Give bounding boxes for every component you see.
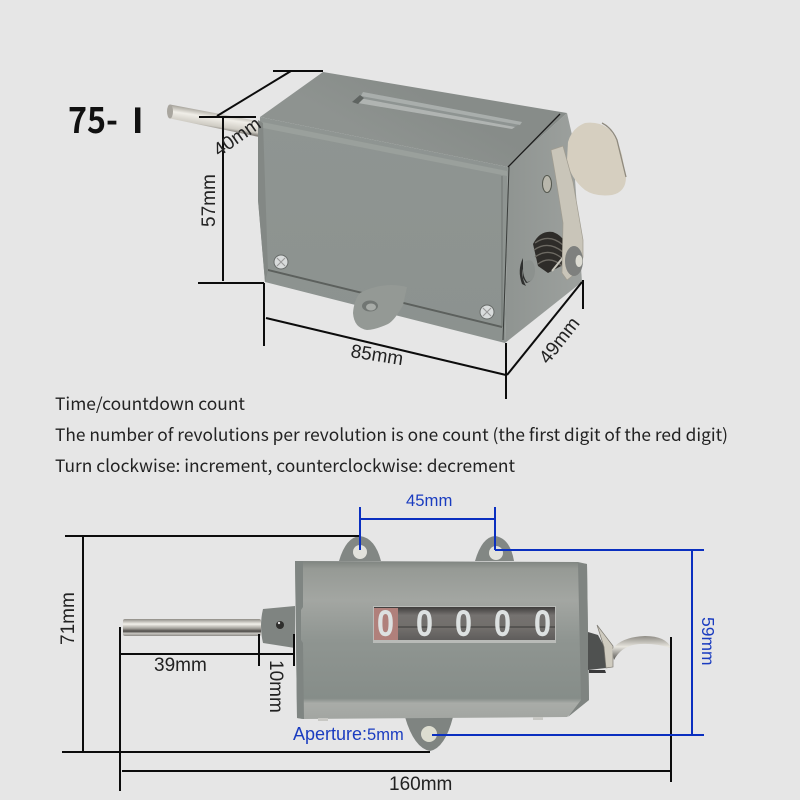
top left lug [339,536,381,561]
digits: 0 [455,603,472,644]
product photo: top view counter [167,72,626,343]
spring and button [520,232,565,286]
counter body [295,561,589,719]
line 1: Time/countdown count [55,390,246,415]
dimension lines: front view, blue [360,507,704,735]
title: I [132,99,143,141]
label: 85mm: 85mm [349,341,405,370]
top right lug [475,536,514,561]
line 3: Turn clockwise: increment, counterclockwise: decrement [55,452,516,477]
label: 45mm: 45mm [406,491,452,510]
digit window [373,603,556,644]
label: 40mm: 40mm [210,114,265,161]
line 2: The number of revolutions per revolution is one count (the first digit of the red digit) [55,421,728,446]
title: 75- [68,92,118,144]
label: 59mm: 59mm [698,617,718,666]
label: 49mm: 49mm [535,314,584,368]
shaft collar [261,606,295,648]
label: 10mm: 10mm [265,660,286,713]
shaft [123,619,261,636]
description text [55,390,728,477]
dimension lines: top view [198,71,583,399]
digits: 0 [416,603,433,644]
right side face [503,113,582,343]
small screws [318,717,543,721]
screws [274,176,552,319]
label: Aperture: Aperture:5mm [293,724,404,744]
dimension lines: front view, black [62,536,671,791]
shaft [167,104,262,137]
side lever [588,625,671,673]
product photo: front view counter [123,536,671,751]
digits: 0 [494,603,511,644]
top face [260,72,567,167]
bottom lug [405,717,453,751]
digits: 0 [534,603,551,644]
digits [377,603,551,644]
label: 71mm: 71mm [58,592,79,645]
foot lug [353,285,407,330]
label: 57mm: 57mm [199,174,220,227]
label: 160mm: 160mm [389,774,452,795]
thumb lever [551,123,626,280]
digits: 0 [377,603,394,644]
front face [258,117,508,343]
label: 39mm: 39mm [154,655,207,676]
